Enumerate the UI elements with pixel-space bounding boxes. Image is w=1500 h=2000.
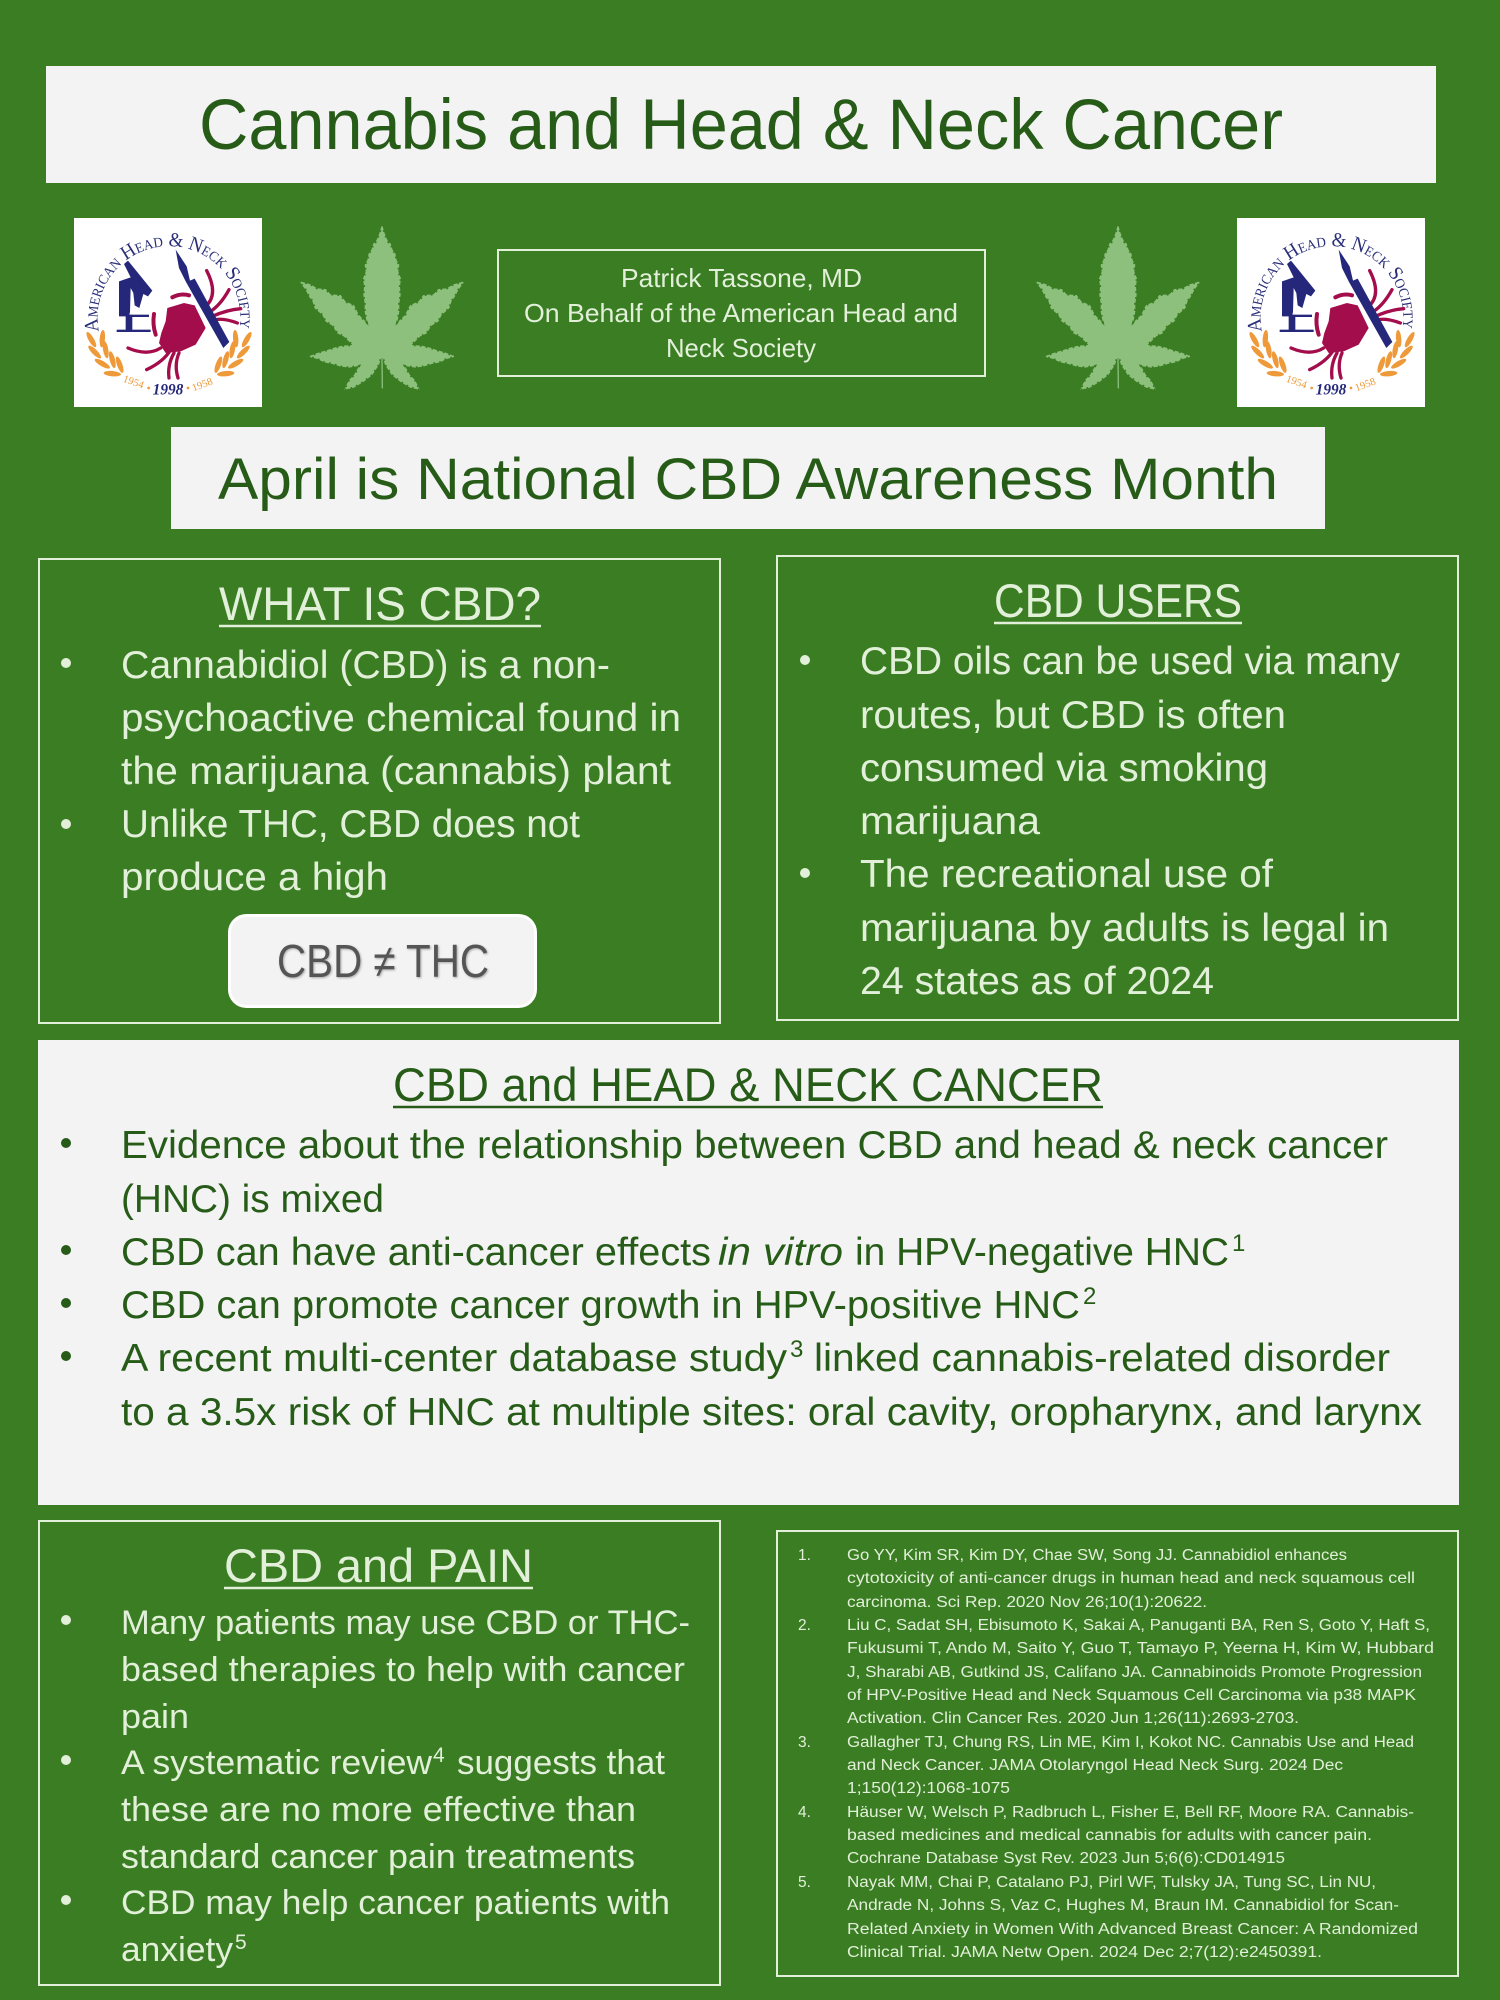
panel: CBD and pain bbox=[39, 1521, 720, 1985]
bullet list: what is CBD: Cannabidiol (CBD) is a non- bbox=[121, 644, 610, 687]
bullet list: what is CBD: psychoactive chemical found in bbox=[121, 697, 681, 740]
logo: American Head & Neck Society (left): 1954 bbox=[121, 374, 146, 392]
bullet list: cancer evidence: linked cannabis-related disorder bbox=[814, 1337, 1390, 1380]
reference 5: 5. bbox=[798, 1874, 811, 1891]
bullet list: CBD users: routes, but CBD is often bbox=[860, 694, 1286, 737]
logo: American Head & Neck Society (right): 1958 bbox=[1354, 377, 1377, 394]
heading: CBD users: CBD USERS bbox=[994, 574, 1242, 627]
logo: American Head & Neck Society (left): 1958 bbox=[191, 377, 214, 394]
bullet list: pain: 5 bbox=[235, 1931, 247, 1954]
title banner bbox=[46, 66, 1436, 183]
reference 4: Cochrane Database Syst Rev. 2023 Jun 5;6(6):CD014915 bbox=[847, 1850, 1285, 1867]
logo: American Head & Neck Society (right): American Head & Neck Society bbox=[1248, 233, 1413, 332]
reference 3: and Neck Cancer. JAMA Otolaryngol Head Neck Surg. 2024 Dec bbox=[847, 1757, 1343, 1774]
reference 3: Gallagher TJ, Chung RS, Lin ME, Kim I, Kokot NC. Cannabis Use and Head bbox=[847, 1734, 1414, 1751]
reference 2: Fukusumi T, Ando M, Saito Y, Guo T, Tamayo P, Yeerna H, Kim W, Hubbard bbox=[847, 1640, 1434, 1657]
logo: American Head & Neck Society (left): 1998 bbox=[153, 382, 184, 399]
bullet list: CBD users: marijuana bbox=[860, 800, 1040, 843]
awareness month banner bbox=[171, 427, 1325, 529]
logo: American Head & Neck Society (left): American Head & Neck Society bbox=[84, 233, 250, 332]
bullet list: pain: 4 bbox=[433, 1744, 445, 1767]
author box: Patrick Tassone, MD bbox=[621, 263, 862, 293]
bullet list: cancer evidence: in vitro bbox=[718, 1231, 843, 1274]
bullet list: cancer evidence: 2 bbox=[1083, 1283, 1096, 1310]
heading: CBD and pain: CBD and PAIN bbox=[224, 1539, 533, 1592]
panel: CBD users bbox=[777, 556, 1458, 1020]
bullet list: pain: these are no more effective than bbox=[121, 1791, 636, 1829]
icon: cannabis leaf (left) bbox=[299, 224, 465, 390]
author box: Neck Society bbox=[666, 333, 816, 363]
callout: CBD not equal THC: CBD ≠ THC bbox=[277, 935, 489, 987]
reference 2: Activation. Clin Cancer Res. 2020 Jun 1;26(11):2693-2703. bbox=[847, 1710, 1299, 1727]
bullet list: pain bbox=[61, 1604, 690, 1969]
reference 5: Andrade N, Johns S, Vaz C, Hughes M, Braun IM. Cannabidiol for Scan- bbox=[847, 1897, 1399, 1914]
author box: On Behalf of the American Head and bbox=[524, 298, 958, 328]
bullet list: CBD users bbox=[800, 640, 1400, 1003]
reference 5: Clinical Trial. JAMA Netw Open. 2024 Dec 2;7(12):e2450391. bbox=[847, 1944, 1322, 1961]
logo: American Head & Neck Society (right) bbox=[1237, 218, 1425, 407]
bullet list: what is CBD: produce a high bbox=[121, 856, 388, 899]
reference 2: of HPV-Positive Head and Neck Squamous Cell Carcinoma via p38 MAPK bbox=[847, 1687, 1417, 1704]
heading: CBD and head and neck cancer: CBD and HEAD & NECK CANCER bbox=[393, 1058, 1103, 1111]
bullet list: CBD users: marijuana by adults is legal in bbox=[860, 907, 1389, 950]
logo: American Head & Neck Society (left) bbox=[74, 218, 262, 407]
bullet list: cancer evidence: CBD can have anti-cancer effects bbox=[121, 1231, 711, 1274]
reference 5 bbox=[798, 1874, 1418, 1961]
bullet list: cancer evidence: 1 bbox=[1232, 1230, 1245, 1257]
bullet list: pain: A systematic review bbox=[121, 1744, 432, 1782]
icon: cannabis leaf (right) bbox=[1035, 224, 1201, 390]
awareness month banner: April is National CBD Awareness Month bbox=[218, 447, 1278, 512]
bullet list: CBD users: consumed via smoking bbox=[860, 747, 1268, 790]
reference 1: carcinoma. Sci Rep. 2020 Nov 26;10(1):20622. bbox=[847, 1594, 1207, 1611]
bullet list: CBD users: The recreational use of bbox=[860, 853, 1273, 896]
bullet list: what is CBD bbox=[61, 644, 681, 899]
logo: American Head & Neck Society (right): 1998 bbox=[1316, 382, 1347, 399]
bullet list: pain: based therapies to help with cancer bbox=[121, 1651, 685, 1689]
reference 2: 2. bbox=[798, 1617, 811, 1634]
bullet list: cancer evidence: (HNC) is mixed bbox=[121, 1178, 384, 1221]
reference 2: Liu C, Sadat SH, Ebisumoto K, Sakai A, Panuganti BA, Ren S, Goto Y, Haft S, bbox=[847, 1617, 1430, 1634]
panel: CBD and head and neck cancer bbox=[38, 1040, 1459, 1505]
reference 3: 3. bbox=[798, 1734, 811, 1751]
bullet list: pain: anxiety bbox=[121, 1931, 233, 1969]
logo: American Head & Neck Society (right): 1954 bbox=[1284, 374, 1309, 392]
bullet list: pain: Many patients may use CBD or THC- bbox=[121, 1604, 690, 1642]
bullet list: pain: standard cancer pain treatments bbox=[121, 1838, 635, 1876]
bullet list: cancer evidence: 3 bbox=[790, 1336, 803, 1363]
bullet list: pain: CBD may help cancer patients with bbox=[121, 1884, 670, 1922]
reference 3 bbox=[798, 1734, 1414, 1797]
bullet list: cancer evidence: in HPV-negative HNC bbox=[855, 1231, 1229, 1274]
reference 5: Nayak MM, Chai P, Catalano PJ, Pirl WF, Tulsky JA, Tung SC, Lin NU, bbox=[847, 1874, 1376, 1891]
bullet list: what is CBD: the marijuana (cannabis) plant bbox=[121, 750, 671, 793]
bullet list: pain: pain bbox=[121, 1698, 189, 1736]
reference 1: cytotoxicity of anti-cancer drugs in human head and neck squamous cell bbox=[847, 1570, 1415, 1587]
reference 1: Go YY, Kim SR, Kim DY, Chae SW, Song JJ. Cannabidiol enhances bbox=[847, 1547, 1347, 1564]
callout: CBD not equal THC bbox=[230, 916, 536, 1006]
bullet list: cancer evidence: CBD can promote cancer growth in HPV-positive HNC bbox=[121, 1284, 1080, 1327]
bullet list: cancer evidence: A recent multi-center database study bbox=[121, 1337, 788, 1380]
reference 2: J, Sharabi AB, Gutkind JS, Califano JA. Cannabinoids Promote Progression bbox=[847, 1664, 1422, 1681]
panel: references bbox=[777, 1531, 1458, 1976]
reference 4 bbox=[798, 1804, 1414, 1867]
author box bbox=[498, 250, 985, 376]
bullet list: cancer evidence bbox=[61, 1124, 1423, 1434]
reference 5: Related Anxiety in Women With Advanced Breast Cancer: A Randomized bbox=[847, 1921, 1418, 1938]
bullet list: what is CBD: Unlike THC, CBD does not bbox=[121, 803, 580, 846]
heading: what is CBD: WHAT IS CBD? bbox=[219, 577, 541, 630]
reference 3: 1;150(12):1068-1075 bbox=[847, 1780, 1010, 1797]
reference 4: Häuser W, Welsch P, Radbruch L, Fisher E, Bell RF, Moore RA. Cannabis- bbox=[847, 1804, 1414, 1821]
bullet list: CBD users: CBD oils can be used via many bbox=[860, 640, 1400, 683]
reference 4: based medicines and medical cannabis for adults with cancer pain. bbox=[847, 1827, 1372, 1844]
bullet list: CBD users: 24 states as of 2024 bbox=[860, 960, 1214, 1003]
reference 4: 4. bbox=[798, 1804, 811, 1821]
reference 2 bbox=[798, 1617, 1434, 1727]
reference 1: 1. bbox=[798, 1547, 811, 1564]
panel: what is CBD bbox=[39, 559, 720, 1023]
bullet list: cancer evidence: Evidence about the relationship between CBD and head & neck cancer bbox=[121, 1124, 1388, 1167]
reference 1 bbox=[798, 1547, 1415, 1611]
bullet list: pain: suggests that bbox=[457, 1744, 666, 1782]
title banner: Cannabis and Head & Neck Cancer bbox=[199, 86, 1283, 165]
bullet list: cancer evidence: to a 3.5x risk of HNC at multiple sites: oral cavity, oropharynx, and larynx bbox=[121, 1391, 1423, 1434]
